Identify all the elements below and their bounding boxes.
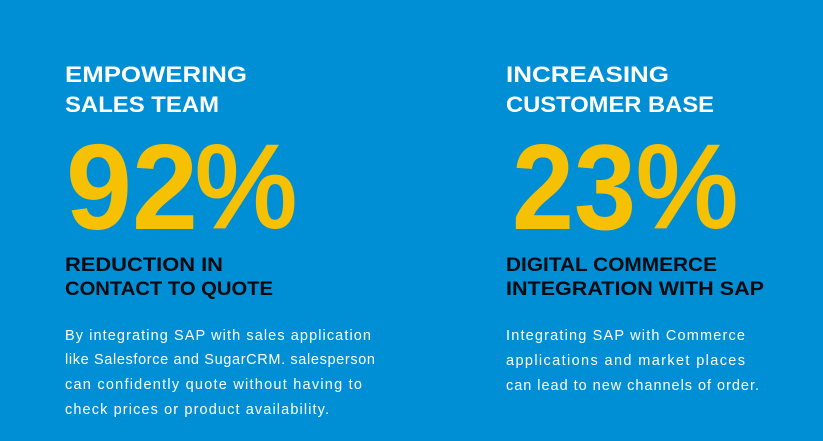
subheading: digital commerce integration with SAP (506, 255, 764, 300)
heading: increasing customer base (506, 62, 714, 117)
subheading: digital commerce integration with SAP: INTEGRATION WITH SAP (506, 279, 764, 300)
body text: commerce integration: applications and market places (506, 353, 745, 369)
subheading: reduction in contact to quote: CONTACT TO QUOTE (65, 279, 273, 300)
body text: commerce integration: Integrating SAP with Commerce (506, 328, 745, 344)
stat: 92%: % (195, 121, 297, 252)
subheading: digital commerce integration with SAP: DIGITAL COMMERCE (506, 255, 717, 276)
stat: 23%: 23 (512, 119, 636, 255)
body text: sales integration: By integrating SAP with sales application (65, 328, 371, 344)
body text: commerce integration: can lead to new channels of order. (506, 378, 759, 394)
heading: empowering sales team (65, 62, 247, 117)
heading: increasing customer base: INCREASING (506, 62, 669, 87)
subheading: reduction in contact to quote: REDUCTION IN (65, 255, 223, 276)
stat: 92% (66, 119, 297, 255)
body text: sales integration: check prices or product availability. (65, 402, 329, 418)
panel: increasing customer base (506, 62, 764, 394)
body text: commerce integration (506, 328, 759, 394)
subheading: reduction in contact to quote (65, 255, 273, 300)
heading: empowering sales team: EMPOWERING (65, 62, 247, 87)
heading: increasing customer base: CUSTOMER BASE (506, 92, 714, 117)
heading: empowering sales team: SALES TEAM (65, 92, 219, 117)
stat: 23%: % (636, 121, 738, 252)
stat: 23% (512, 119, 738, 255)
body text: sales integration (65, 328, 375, 418)
stat: 92%: 92 (66, 119, 198, 255)
body text: sales integration: can confidently quote without having to (65, 377, 362, 393)
body text: sales integration: like Salesforce and SugarCRM. salesperson (65, 352, 375, 368)
panel: empowering sales team (65, 62, 375, 418)
